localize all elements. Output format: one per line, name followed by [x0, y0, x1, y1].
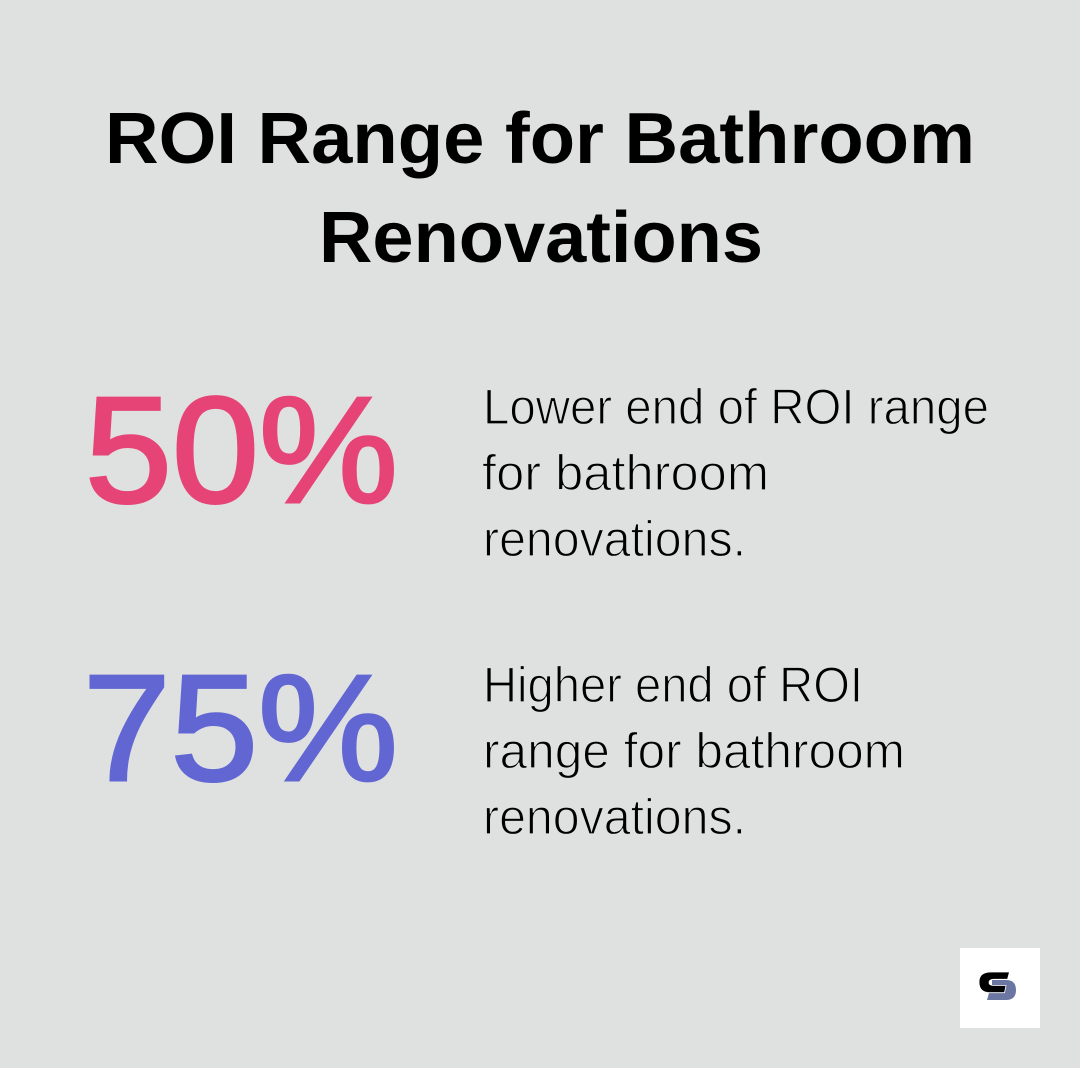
description: higher end — [483, 657, 905, 845]
description: higher end: range for bathroom — [483, 723, 905, 779]
title: Renovations — [319, 198, 763, 278]
description: lower end: Lower end of ROI range — [483, 379, 989, 435]
description: lower end: renovations. — [483, 511, 746, 567]
title — [105, 99, 975, 278]
title: ROI Range for Bathroom — [105, 99, 975, 179]
number: 50%: 50% — [85, 365, 398, 534]
description: lower end: for bathroom — [482, 445, 769, 501]
number: 75%: 75% — [83, 643, 398, 812]
logo mark — [979, 972, 1016, 1000]
description: higher end: Higher end of ROI — [483, 657, 863, 713]
stat: 50% lower end — [85, 365, 989, 567]
stat: 75% higher end — [83, 643, 905, 845]
description: higher end: renovations. — [483, 789, 746, 845]
logo badge — [960, 948, 1040, 1028]
description: lower end — [482, 379, 989, 567]
